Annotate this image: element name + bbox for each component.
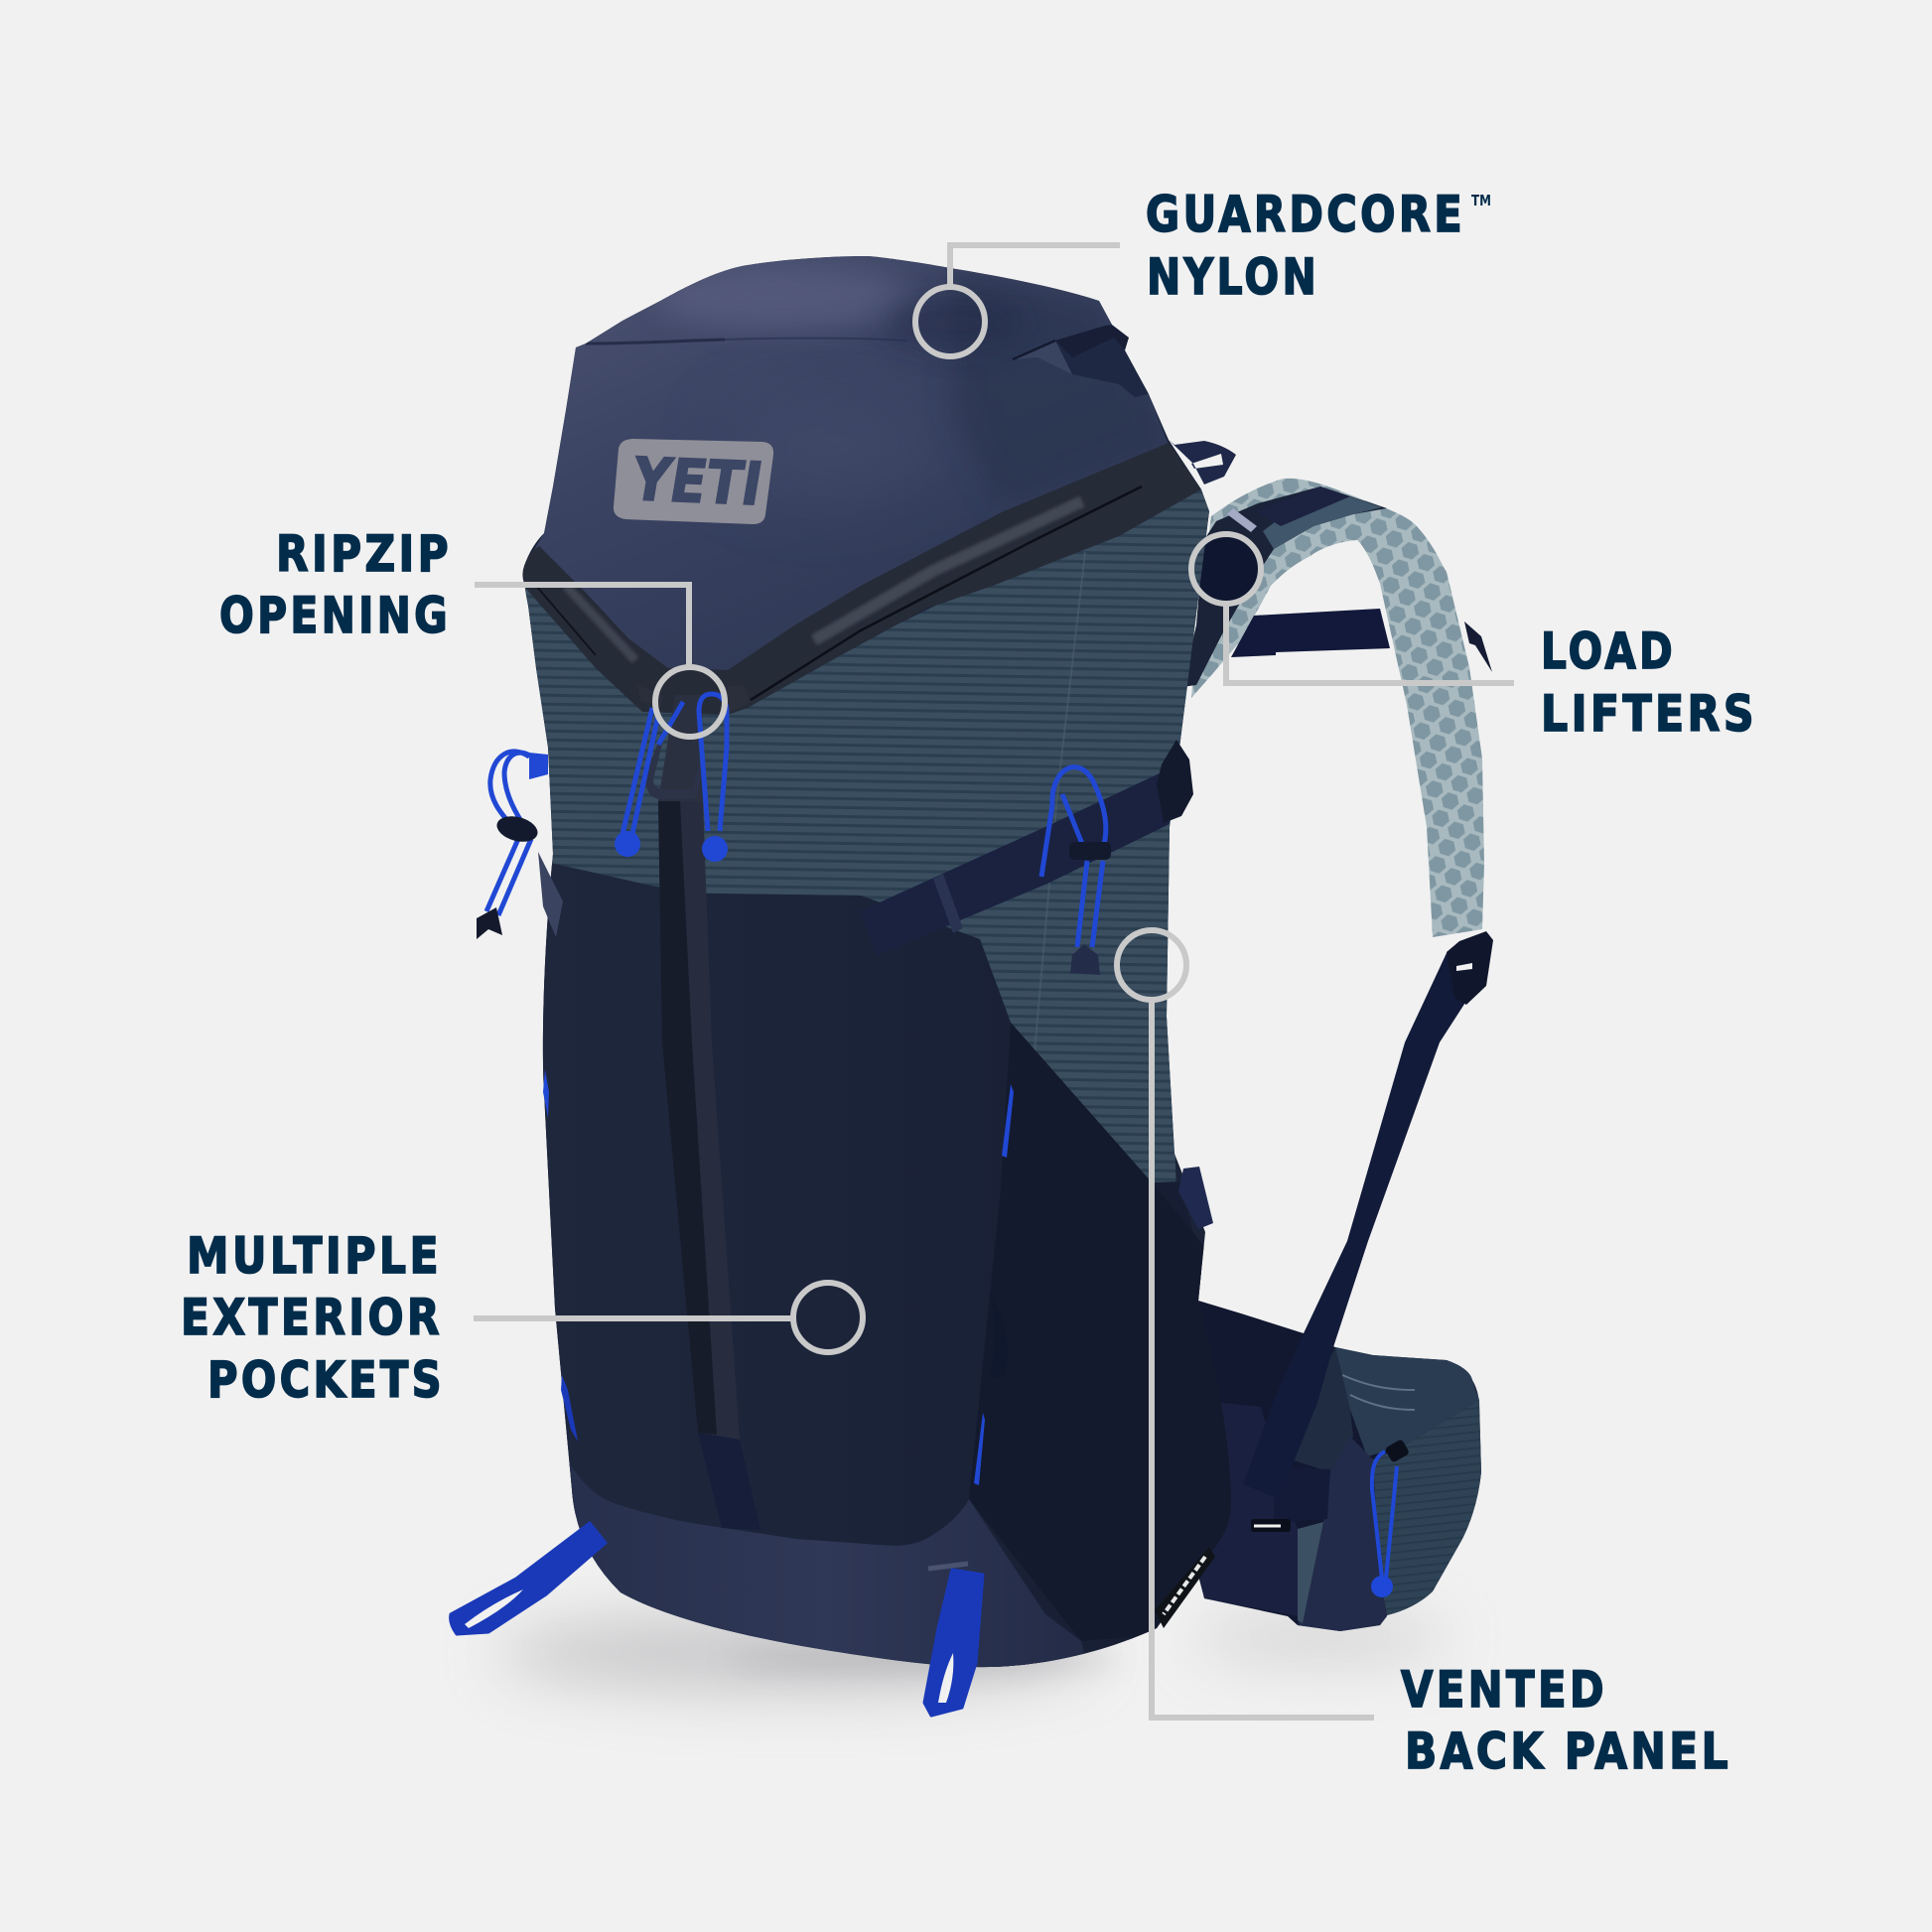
label: LOAD xyxy=(1541,622,1676,680)
bottom panel xyxy=(570,1464,1084,1668)
top haul loop xyxy=(1169,440,1236,484)
zipper pull tab xyxy=(645,740,703,799)
label xyxy=(1401,1661,1731,1780)
blue slit trims xyxy=(543,1069,1014,1485)
lower strap buckle xyxy=(1447,931,1493,1005)
label: BACK PANEL xyxy=(1405,1723,1731,1780)
label xyxy=(181,1227,445,1409)
blue cord: zipper pulls xyxy=(615,694,728,862)
right back shading xyxy=(969,1023,1204,1640)
bag label xyxy=(1155,1547,1215,1628)
callout: RipZip opening xyxy=(219,525,725,737)
side seam highlight xyxy=(1035,552,1085,1052)
lower shoulder strap xyxy=(1243,953,1481,1499)
label xyxy=(1541,622,1757,743)
label xyxy=(219,525,452,644)
leader line and ring xyxy=(474,1283,863,1352)
pouch blue cord xyxy=(1371,1439,1410,1597)
callout: vented back panel xyxy=(1117,930,1731,1780)
belt buckle xyxy=(1251,1519,1291,1532)
compression buckle upper xyxy=(1157,740,1193,823)
pouch upper textured band xyxy=(1335,1347,1479,1456)
blue bottom-left loop xyxy=(451,1523,606,1634)
lower front panel xyxy=(536,860,1241,1678)
pouch navy panel xyxy=(1298,1437,1387,1631)
side compression strap xyxy=(860,772,1170,955)
callout: load lifters xyxy=(1191,534,1757,743)
left side pocket tab xyxy=(538,852,563,937)
leader line and ring xyxy=(1117,930,1374,1718)
blue bottom-centre loop xyxy=(924,1564,983,1716)
label: NYLON xyxy=(1147,248,1319,306)
shoulder strap webbing xyxy=(1181,486,1387,687)
center vertical zipper xyxy=(658,695,740,1440)
leader line and ring xyxy=(915,245,1120,356)
label: GUARDCORE xyxy=(1146,186,1465,243)
lid top strap fold xyxy=(1013,325,1149,397)
YETI logo badge: YETI xyxy=(626,445,767,519)
striped mid panel xyxy=(516,477,1216,1191)
pouch inner dark xyxy=(1291,1347,1353,1472)
compression buckle lower xyxy=(1178,1167,1213,1229)
blue cord: left side xyxy=(477,752,548,939)
lid right shade xyxy=(953,270,1167,484)
label: POCKETS xyxy=(207,1351,445,1409)
callout: multiple exterior pockets xyxy=(181,1227,863,1409)
belt base xyxy=(1198,1301,1481,1631)
leader line and ring xyxy=(475,585,725,737)
label: MULTIPLE xyxy=(187,1227,442,1285)
label: TM xyxy=(1471,192,1491,209)
strap side toggle xyxy=(1464,621,1492,672)
waist belt pouch xyxy=(1191,1301,1481,1631)
label: EXTERIOR xyxy=(181,1289,443,1346)
backpack illustration xyxy=(451,256,1493,1716)
shoulder strap mesh padding xyxy=(1191,479,1484,937)
lid panel xyxy=(524,256,1169,670)
callout: GuardCore nylon xyxy=(915,186,1491,356)
label xyxy=(1146,186,1491,306)
roll-top zipper band xyxy=(522,443,1201,715)
tie band xyxy=(1274,1466,1330,1523)
label: LIFTERS xyxy=(1541,685,1757,743)
leader line and ring xyxy=(1191,534,1514,683)
lid fold seam xyxy=(586,340,725,344)
main pack body xyxy=(516,256,1241,1688)
bottom strap tab xyxy=(698,1433,760,1530)
body base xyxy=(524,256,1231,1667)
label: RIPZIP xyxy=(276,525,452,583)
grey sliver xyxy=(1298,1522,1323,1623)
zipper sliders xyxy=(637,685,750,713)
lower navy wing xyxy=(1191,1403,1298,1616)
striped pouch panel xyxy=(1373,1400,1481,1615)
side pocket hand grip xyxy=(990,1291,1008,1380)
label: VENTED xyxy=(1401,1661,1607,1719)
lid soft highlight xyxy=(655,266,913,330)
label: OPENING xyxy=(219,587,451,644)
lifter strap xyxy=(1231,609,1390,657)
blue cord: right side xyxy=(1041,767,1111,975)
ground shadow xyxy=(496,1613,1449,1693)
